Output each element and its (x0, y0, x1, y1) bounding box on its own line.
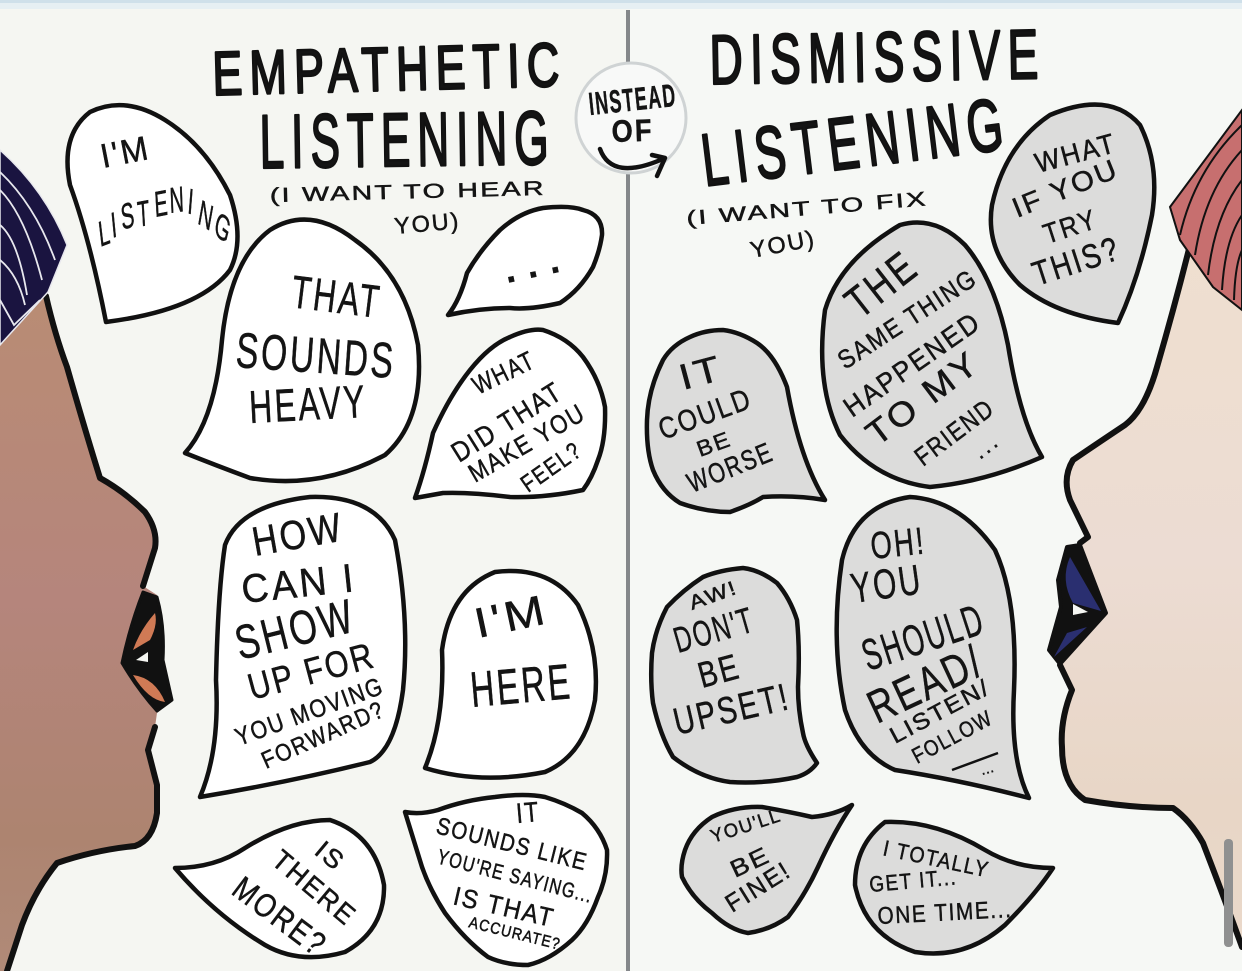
bubble: I'm listening (68, 105, 238, 322)
bubble: ellipsis (448, 207, 602, 315)
title: empathetic listening: (I WANT TO HEAR (270, 178, 546, 207)
left face profile (0, 296, 173, 971)
left lips (122, 592, 172, 711)
bubble: the same thing happened (822, 222, 1042, 487)
bubble: what if you try this: IF YOU (1008, 153, 1123, 224)
bubble: I totally get it: I TOTALLY (881, 835, 992, 882)
title: dismissive listening (686, 15, 1046, 263)
bubble: what did that make you feel: DID THAT (446, 376, 568, 468)
bubble: that sounds heavy (185, 220, 419, 481)
bubble: it could be worse: IT (674, 347, 728, 398)
bubble: is there more: THERE (266, 844, 363, 932)
divider line (626, 10, 630, 971)
bubble: that sounds heavy: HEAVY (248, 375, 368, 433)
bubble: that sounds heavy: SOUNDS (234, 322, 398, 389)
bubble: what did that make you feel: WHAT (467, 344, 540, 400)
bubble: the same thing happened: FRIEND (909, 392, 1000, 472)
bubble: oh you should read: ... (979, 759, 996, 778)
bubble: what if you try this: THIS? (1028, 230, 1125, 294)
bubble: is there more (175, 820, 384, 964)
bubble: how can I show up (200, 497, 405, 797)
bubble: the same thing happened: HAPPENED (838, 306, 987, 423)
bubble: oh you should read: FOLLOW (908, 705, 997, 768)
bubble: it could be worse: COULD (654, 382, 757, 447)
bubble: that sounds heavy: THAT (289, 265, 384, 328)
bubble: what did that make you feel: MAKE YOU (463, 397, 591, 488)
instead of badge: OF (611, 113, 654, 149)
bubble: ellipsis: ... (500, 239, 565, 291)
bubble: I'm listening: LISTENING (97, 180, 234, 255)
bubble: it could be worse: BE (693, 426, 735, 462)
bubble: it could be worse (647, 330, 825, 512)
bubble: what did that make you feel (415, 330, 605, 498)
bubble: you'll be fine: YOU'LL (708, 805, 784, 848)
bubble: how can I show up: SHOW (230, 590, 361, 671)
bubble: it sounds like you're saying: IT (515, 796, 541, 829)
right lips (1049, 545, 1106, 664)
bubble: aw don't be upset (651, 568, 817, 782)
right hair (1170, 110, 1242, 310)
bubble: I totally get it: GET IT... (868, 864, 958, 897)
bubble: oh you should read: LISTEN/ (885, 674, 994, 748)
bubble: oh you should read (837, 497, 1029, 798)
bubble: it sounds like you're saying: YOU'RE SAYING... (435, 846, 595, 908)
title: empathetic listening (212, 31, 567, 239)
bubble: aw don't be upset: DON'T (669, 599, 759, 661)
bubble: what if you try this: WHAT (1032, 127, 1120, 179)
title: dismissive listening: YOU) (748, 225, 818, 263)
bubble: oh you should read: YOU (848, 555, 926, 612)
bubble: how can I show up: FORWARD? (257, 696, 389, 774)
bubble: I totally get it (855, 822, 1053, 953)
bubble: how can I show up: YOU MOVING (231, 672, 388, 752)
right face profile (1049, 245, 1242, 947)
bubble: I'm listening: I'M (97, 129, 154, 176)
icon: curved arrow (600, 149, 665, 176)
bubble: it sounds like you're saying: ACCURATE? (467, 914, 562, 954)
bubble: how can I show up: HOW (249, 504, 347, 565)
bubble: how can I show up: CAN I (239, 556, 358, 612)
bubble: it could be worse: WORSE (683, 436, 778, 499)
bubble: you'll be fine: BE (726, 842, 775, 883)
bubble: how can I show up: UP FOR (243, 634, 380, 708)
bubble: you'll be fine (681, 805, 852, 933)
instead of badge (576, 63, 686, 176)
bubble: aw don't be upset: UPSET! (670, 676, 794, 744)
left headwrap (0, 150, 67, 345)
scrollbar (1224, 839, 1233, 947)
bubble: aw don't be upset: BE (693, 645, 745, 696)
title: dismissive listening: (I WANT TO FIX (686, 188, 929, 230)
title: empathetic listening: YOU) (393, 207, 461, 239)
bubble: what if you try this: TRY (1039, 203, 1101, 250)
title: empathetic listening: LISTENING (259, 96, 556, 185)
bubble: I totally get it: ONE TIME... (877, 896, 1013, 930)
bubble: is there more: IS (309, 835, 351, 877)
title: empathetic listening: EMPATHETIC (212, 31, 567, 109)
bubble: it sounds like you're saying: IS THAT (451, 881, 558, 933)
bubble: I'm here (425, 571, 596, 778)
bubble: what if you try this (991, 105, 1154, 323)
bubble: oh you should read: SHOULD (856, 595, 991, 681)
bubble: the same thing happened: SAME THING (832, 263, 982, 375)
bubble: oh you should read: READ/ (859, 634, 992, 733)
bubble: it sounds like you're saying (405, 795, 607, 965)
bubble: I'm here: I'M (470, 585, 552, 647)
bubble: what did that make you feel: FEEL? (516, 437, 587, 498)
bubble: the same thing happened: THE (836, 241, 928, 328)
bubble: you'll be fine: FINE! (720, 856, 796, 918)
bubble: I'm here: HERE (468, 653, 575, 718)
bubble: it sounds like you're saying: SOUNDS LIKE (434, 813, 590, 876)
bubble: aw don't be upset: AW! (686, 577, 741, 615)
bubble: the same thing happened: TO MY (859, 344, 987, 453)
bubble: oh you should read: OH! (869, 520, 928, 568)
title: dismissive listening: LISTENING (697, 82, 1015, 202)
instead of badge: INSTEAD (587, 77, 678, 122)
bubble: the same thing happened: ... (968, 428, 1004, 464)
title: dismissive listening: DISMISSIVE (709, 15, 1046, 99)
